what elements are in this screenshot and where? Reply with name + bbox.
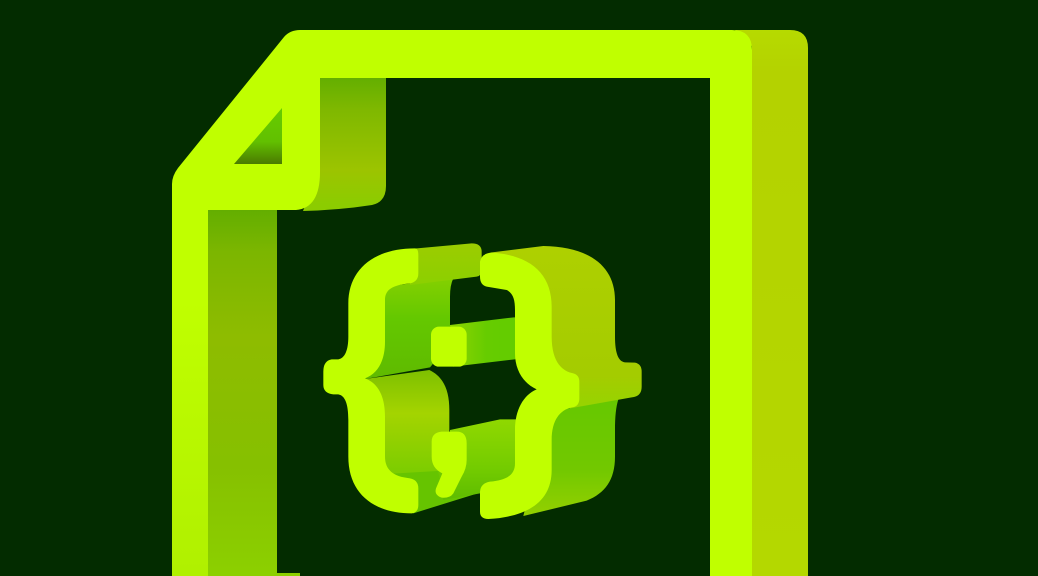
left brace upper side — [365, 278, 453, 379]
comma front face — [432, 432, 467, 498]
right brace upper side — [490, 246, 642, 408]
document left strip side wall — [208, 208, 300, 576]
centre bar side — [450, 317, 523, 367]
document right side wall — [735, 30, 808, 576]
comma side — [438, 419, 523, 500]
folded corner side wall — [303, 76, 386, 211]
left brace lower side — [365, 370, 449, 478]
left brace top side — [410, 243, 482, 285]
right brace front face — [480, 253, 579, 519]
left brace front face — [323, 248, 418, 513]
left strip face shading — [172, 300, 208, 576]
left brace bottom side — [387, 471, 480, 513]
fold triangle opening — [234, 108, 282, 164]
centre bar front face — [431, 327, 467, 367]
right brace lower side — [523, 399, 618, 516]
icon: document outline — [172, 30, 808, 576]
icon: curly braces and colon — [323, 243, 642, 519]
document front face — [172, 30, 752, 576]
